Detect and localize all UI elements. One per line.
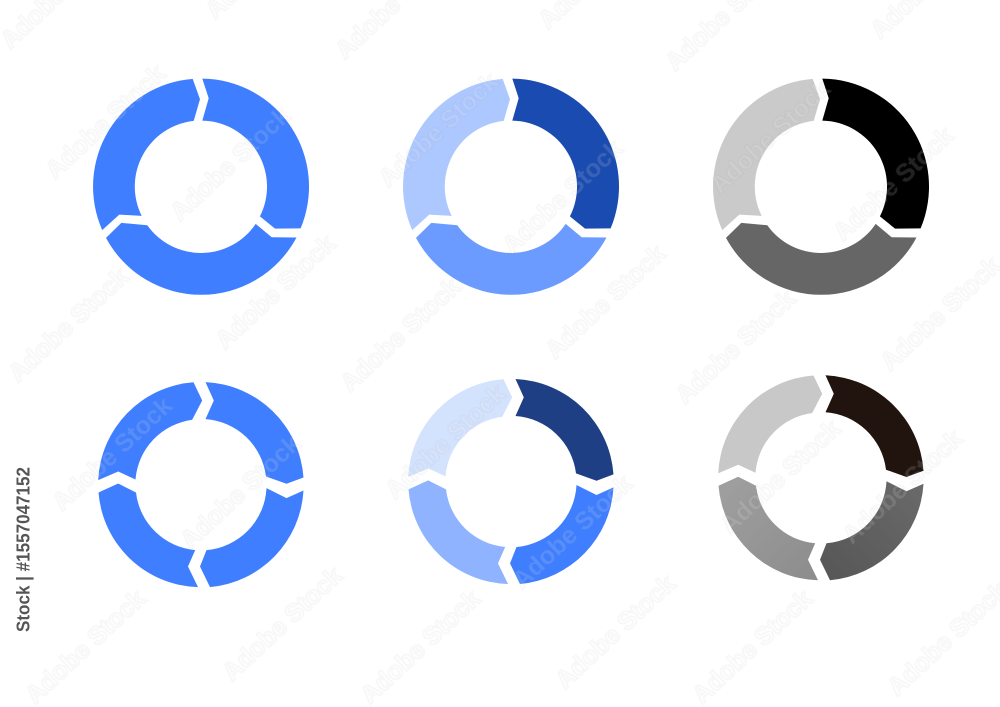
segment: left light grey xyxy=(713,79,820,230)
watermark pattern: Adobe Stock xyxy=(20,585,151,707)
watermark pattern: Adobe Stock xyxy=(497,135,628,259)
watermark pattern: Adobe Stock xyxy=(540,240,671,364)
watermark pattern: Adobe Stock xyxy=(687,585,818,707)
watermark pattern: Adobe Stock xyxy=(837,425,968,549)
watermark pattern: Adobe Stock xyxy=(705,75,836,199)
watermark pattern: Adobe Stock xyxy=(550,570,681,694)
segment: top left xyxy=(98,382,202,480)
watermark pattern: Adobe Stock xyxy=(507,470,638,594)
segment: bottom left mid grey xyxy=(718,477,818,580)
segment: bottom right blue xyxy=(510,485,614,584)
ring: three-part greyscale xyxy=(713,79,929,295)
watermark pattern: Adobe Stock xyxy=(335,273,466,397)
segment: bottom right xyxy=(200,488,304,587)
segment: bottom xyxy=(106,223,296,295)
segment: bottom left light blue xyxy=(408,480,508,584)
watermark pattern: Adobe Stock xyxy=(670,285,801,409)
segment: bottom right dark grey xyxy=(820,481,924,580)
segment: top left light grey xyxy=(718,376,822,473)
watermark pattern: Adobe Stock xyxy=(380,380,511,504)
ring: three-part blue xyxy=(93,79,309,295)
segment: top right xyxy=(202,79,309,229)
ring: four-part greyscale xyxy=(718,375,924,580)
segment: bottom dark grey xyxy=(726,223,916,295)
segment: left xyxy=(93,79,200,230)
segment: top right navy xyxy=(516,379,614,481)
segment: top right black xyxy=(822,79,929,229)
watermark pattern: Adobe Stock xyxy=(355,585,486,707)
ring: three-part blue shades xyxy=(403,79,619,295)
watermark pattern: Adobe Stock xyxy=(715,415,846,539)
segment: top right dark xyxy=(512,79,619,229)
stock id text: Stock | #1557047152 xyxy=(14,467,34,632)
ring: four-part blue shades xyxy=(408,379,614,584)
segment: top right near-black xyxy=(826,375,924,477)
watermark pattern: Adobe Stock xyxy=(40,60,171,184)
segment: bottom medium xyxy=(416,223,606,295)
ring: four-part blue xyxy=(98,382,304,587)
watermark pattern: Adobe Stock xyxy=(217,562,348,686)
segment: left light xyxy=(403,79,510,230)
watermark pattern: Adobe Stock xyxy=(165,102,296,226)
watermark pattern: Adobe Stock xyxy=(210,230,341,354)
watermark pattern: Adobe Stock xyxy=(3,263,134,387)
watermark pattern: Adobe Stock xyxy=(373,68,504,192)
segment: top right xyxy=(206,382,304,484)
watermark pattern: Adobe Stock xyxy=(828,122,959,246)
watermark pattern: Adobe Stock xyxy=(47,392,178,516)
segment: top left pale blue xyxy=(408,379,512,477)
watermark pattern: Adobe Stock xyxy=(175,430,306,554)
segment: bottom left xyxy=(98,484,198,587)
